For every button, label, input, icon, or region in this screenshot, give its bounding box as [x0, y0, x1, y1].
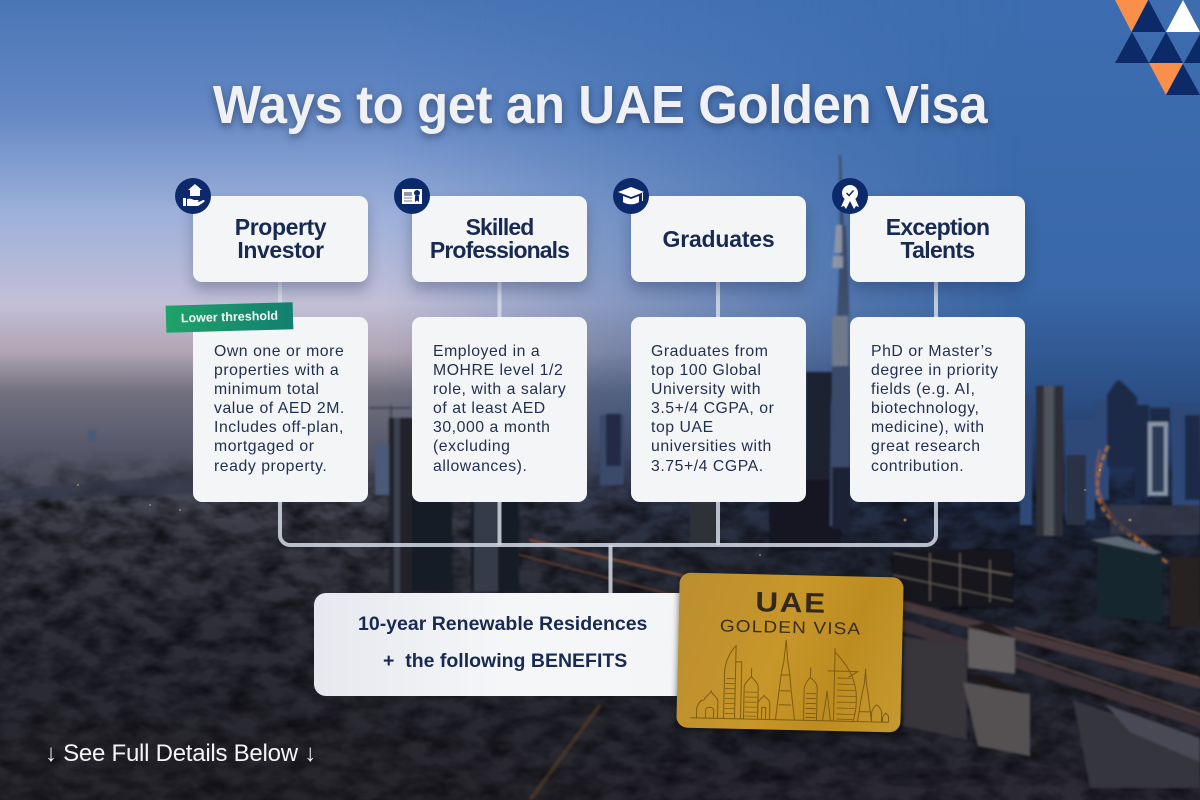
panel: Property Investor details: ready property.	[214, 458, 327, 475]
highway	[520, 540, 1200, 722]
panel: Property Investor details: Own one or more	[214, 343, 344, 360]
icon: certificate	[394, 178, 430, 214]
panel: Skilled Professionals details: 30,000 a month	[433, 419, 550, 436]
badge: Lower threshold	[166, 302, 293, 333]
far towers	[375, 395, 1200, 525]
panel: Skilled Professionals details: MOHRE level 1/2	[433, 362, 563, 379]
panel: Graduates heading	[631, 196, 806, 282]
panel: Skilled Professionals details: allowances).	[433, 458, 527, 475]
right tower with crown	[1036, 386, 1063, 536]
panel: Property Investor details: Includes off-plan,	[214, 419, 344, 436]
panel: Skilled Professionals details: (excluding	[433, 438, 511, 455]
panel: Skilled Professionals details: Employed in a	[433, 343, 540, 360]
icon: award rosette	[832, 178, 868, 214]
title: Ways to get an UAE Golden Visa	[213, 75, 987, 134]
panel: Exception Talents details: medicine), with	[871, 419, 985, 436]
panel: Property Investor heading	[193, 196, 368, 282]
text: benefits line: + the following BENEFITS	[383, 650, 627, 672]
panel: Exception Talents details: great research	[871, 438, 981, 455]
panel: Graduates details: University with	[651, 381, 761, 398]
panel: Skilled Professionals heading: Professionals	[430, 237, 569, 263]
downtown dark towers	[389, 418, 413, 594]
panel: Graduates details: 3.75+/4 CGPA.	[651, 458, 764, 475]
panel: Exception Talents heading: Exception	[886, 214, 989, 240]
panel: Exception Talents details: degree in priority	[871, 362, 999, 379]
icon: hand holding house	[175, 178, 211, 214]
panel: Graduates details: Graduates from	[651, 343, 768, 360]
badge: Lower threshold: Lower threshold	[181, 309, 278, 325]
panel: Skilled Professionals heading	[412, 196, 587, 282]
panel: Property Investor details: properties with a	[214, 362, 339, 379]
panel: Property Investor details: mortgaged or	[214, 438, 315, 455]
Burj Khalifa	[830, 155, 850, 526]
panel: Skilled Professionals details: of at least AED	[433, 400, 546, 417]
panel: Graduates details: top 100 Global	[651, 362, 761, 379]
mid district	[893, 550, 1013, 607]
panel: Exception Talents heading	[850, 196, 1025, 282]
card title: UAE: UAE	[755, 586, 827, 619]
text: residence line: 10-year Renewable Residences	[358, 613, 647, 635]
far water tower and shore	[88, 430, 96, 441]
logo: triangle pattern	[1115, 0, 1200, 95]
panel: Property Investor details	[193, 317, 368, 502]
panel: Graduates heading: Graduates	[663, 226, 774, 252]
card skyline engraving	[690, 640, 889, 723]
footer: see full details: ↓ See Full Details Below ↓	[45, 740, 316, 767]
icon: graduation cap	[613, 178, 649, 214]
panel: Property Investor details: minimum total	[214, 381, 319, 398]
panel: Exception Talents heading: Talents	[901, 237, 974, 263]
panel: Skilled Professionals details: role, with a salary	[433, 381, 566, 398]
panel: Exception Talents details: PhD or Master’s	[871, 343, 993, 360]
panel: Property Investor details: value of AED 2M.	[214, 400, 345, 417]
panel: Graduates details	[631, 317, 806, 502]
panel: Skilled Professionals heading: Skilled	[466, 214, 533, 240]
city lights trail	[1097, 446, 1168, 564]
panel: Skilled Professionals details	[412, 317, 587, 502]
panel: Exception Talents details: contribution.	[871, 458, 964, 475]
panel: Graduates details: universities with	[651, 438, 772, 455]
card subtitle: Golden Visa: GOLDEN VISA	[720, 616, 861, 639]
panel: Property Investor heading: Investor	[237, 237, 324, 263]
panel: Graduates details: 3.5+/4 CGPA, or	[651, 400, 774, 417]
apartment buildings	[903, 636, 967, 740]
panel: Exception Talents details: fields (e.g. AI,	[871, 381, 976, 398]
panel: Exception Talents details: biotechnology,	[871, 400, 979, 417]
golden visa card	[676, 572, 904, 733]
panel: benefits summary	[314, 593, 694, 696]
crane	[369, 405, 411, 435]
panel: Graduates details: top UAE	[651, 419, 714, 436]
panel: Property Investor heading: Property	[235, 214, 326, 240]
panel: Exception Talents details	[850, 317, 1025, 502]
